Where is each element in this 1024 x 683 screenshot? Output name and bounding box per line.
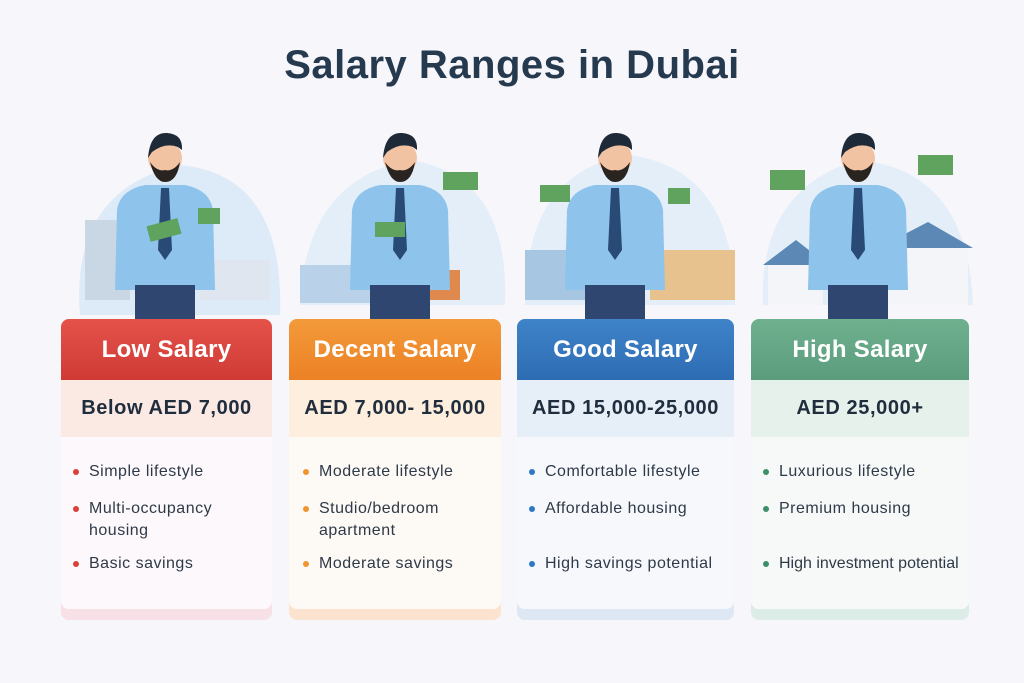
bullets: good: Comfortable lifestyle [545, 463, 700, 480]
bullets: decent: apartment [319, 522, 396, 539]
bullets: low: housing [89, 522, 149, 539]
header: high: High Salary [792, 336, 928, 363]
illustration: decent [300, 133, 506, 319]
bullets: low: Multi-occupancy [89, 500, 212, 517]
illustration: low [79, 133, 280, 319]
bullets: low: Simple lifestyle [89, 463, 204, 480]
card: good salary [517, 319, 734, 620]
title: Salary Ranges in Dubai [284, 43, 740, 87]
card: high salary [751, 319, 969, 620]
range: low [61, 380, 272, 437]
range: good [517, 380, 734, 437]
bullets: decent: Studio/bedroom [319, 500, 439, 517]
bullets: good: High savings potential [545, 555, 713, 572]
bullets: high [751, 437, 969, 609]
range: low: Below AED 7,000 [81, 397, 252, 419]
illustration: high [762, 133, 973, 319]
bullets: high: High investment potential [779, 555, 959, 572]
bullets: high: Premium housing [779, 500, 911, 517]
bullets: good: Affordable housing [545, 500, 687, 517]
range: good: AED 15,000-25,000 [532, 397, 719, 419]
range: high [751, 380, 969, 437]
header: good [517, 319, 734, 380]
header: decent: Decent Salary [314, 336, 476, 363]
card: decent salary [289, 319, 501, 620]
range: decent: AED 7,000- 15,000 [304, 397, 486, 419]
bullets: decent: Moderate lifestyle [319, 463, 453, 480]
bullets: decent: Moderate savings [319, 555, 453, 572]
header: low: Low Salary [102, 336, 231, 363]
card: low salary [61, 319, 272, 620]
header: high [751, 319, 969, 380]
bullets: decent [289, 437, 501, 609]
illustration: good [525, 133, 735, 319]
range: high: AED 25,000+ [796, 397, 924, 419]
header: decent [289, 319, 501, 380]
header: good: Good Salary [553, 336, 698, 363]
bullets: low: Basic savings [89, 555, 193, 572]
bullets: high: Luxurious lifestyle [779, 463, 916, 480]
bullets: low [61, 437, 272, 609]
bullets: good [517, 437, 734, 609]
header: low [61, 319, 272, 380]
range: decent [289, 380, 501, 437]
